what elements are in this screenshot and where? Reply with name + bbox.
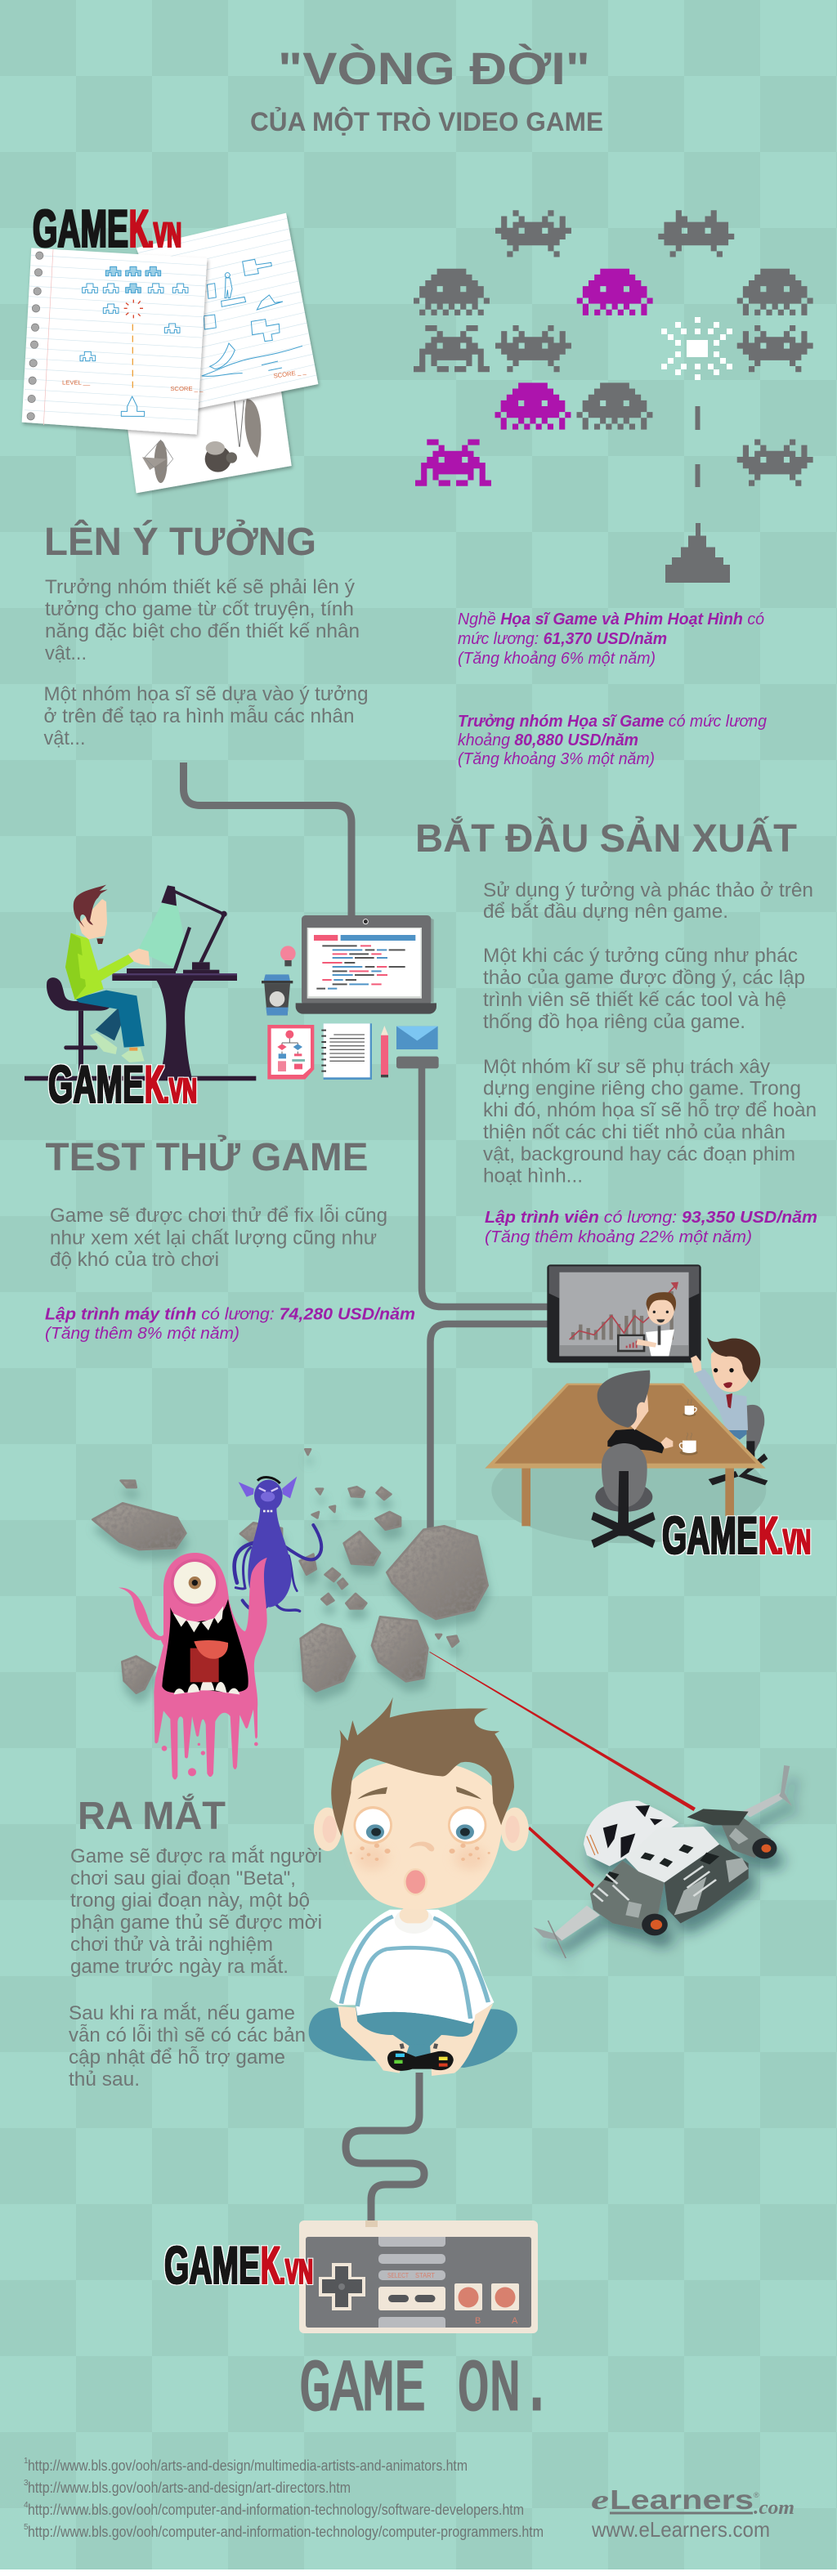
text block: hoạt hình... xyxy=(483,1165,583,1187)
player ship xyxy=(665,523,730,583)
heading: BẮT ĐẦU SẢN XUẤT xyxy=(415,816,797,861)
wings xyxy=(534,1765,792,1958)
footnotes: 5 xyxy=(24,2523,29,2532)
illustration: space invaders xyxy=(414,210,813,583)
heading: RA MẮT xyxy=(78,1793,226,1838)
person pointing, far chair xyxy=(691,1338,768,1485)
heading: TEST THỬ GAME xyxy=(46,1134,368,1179)
eyebrows xyxy=(357,1787,481,1800)
lamp light xyxy=(137,903,186,967)
text block: tưởng cho game từ cốt truyện, tính xyxy=(45,598,354,620)
text block: độ khó của trò chơi xyxy=(50,1249,219,1271)
text block: như xem xét lại chất lượng cũng như xyxy=(50,1228,377,1249)
select and start: SELECT xyxy=(387,2272,409,2279)
text block: Sử dụng ý tưởng và phác thảo ở trên xyxy=(483,879,813,901)
text block: thống đồ họa riêng của game. xyxy=(483,1011,745,1033)
logo: GameK: .VN xyxy=(163,1071,197,1111)
salary: testers: (Tăng thêm 8% một năm) xyxy=(45,1325,239,1343)
salary: programmers: Lập trình viên có lương: 93,350 USD/năm xyxy=(485,1209,817,1227)
text block: chơi sau giai đoạn "Beta", xyxy=(70,1867,296,1890)
illustration: rocks and monsters xyxy=(92,1449,488,1779)
salary: game artists: mức lương: 61,370 USD/năm xyxy=(458,630,667,648)
cable: idea to laptop xyxy=(183,763,351,919)
B button xyxy=(454,2283,482,2326)
panel: idea stage xyxy=(44,519,369,749)
illustration: sketched game design papers xyxy=(22,211,319,493)
asteroids xyxy=(92,1449,488,1693)
mouth xyxy=(404,1868,427,1895)
footnotes: http://www.bls.gov/ooh/computer-and-information-technology/computer-programmers.htm xyxy=(28,2524,544,2540)
face xyxy=(341,1760,503,1909)
B button: B xyxy=(475,2316,481,2326)
logo: eLearners xyxy=(591,2484,794,2542)
salary: testers: Lập trình máy tính có lương: 74,280 USD/năm xyxy=(45,1306,415,1324)
text block: vật, background hay các đoạn phim xyxy=(483,1143,795,1165)
invader row 2 xyxy=(414,269,813,315)
ears xyxy=(314,1808,529,1851)
pink monster xyxy=(119,1553,267,1779)
text block xyxy=(483,879,817,1187)
text block: game trước ngày ra mắt. xyxy=(70,1956,289,1978)
icon: envelope xyxy=(396,1026,438,1049)
wall monitor xyxy=(547,1264,701,1362)
invader row 3 xyxy=(414,325,813,372)
desk xyxy=(112,885,237,1078)
arms xyxy=(338,2004,493,2076)
logo: GameK: GAME xyxy=(48,1054,144,1114)
sketch paper: platformer game xyxy=(137,211,319,427)
logo: eLearners: Learners xyxy=(610,2484,754,2515)
icon: coffee cup xyxy=(262,974,293,1015)
laser beams xyxy=(429,1652,696,1888)
footnotes: http://www.bls.gov/ooh/arts-and-design/art-directors.htm xyxy=(28,2480,351,2496)
panel: testing stage xyxy=(45,1134,415,1343)
engines xyxy=(642,1838,777,1935)
salary: lead game artist: (Tăng khoảng 3% một năm) xyxy=(458,750,655,768)
nose xyxy=(409,1842,434,1851)
text block: khi đó, nhóm họa sĩ sẽ hỗ trợ để hoàn xyxy=(483,1099,817,1121)
select and start: START xyxy=(415,2272,435,2279)
text block xyxy=(44,576,369,749)
icon: flowchart xyxy=(267,1025,314,1080)
salary: testers xyxy=(45,1306,415,1343)
footnotes: 1 xyxy=(24,2457,29,2466)
logo: eLearners: .com xyxy=(754,2498,794,2519)
salary: game artists xyxy=(458,610,764,668)
gamepad xyxy=(387,2044,454,2071)
player bullets xyxy=(695,406,700,487)
table shadow xyxy=(491,1437,766,1543)
text block: Một nhóm kĩ sư sẽ phụ trách xây xyxy=(483,1056,770,1078)
chair xyxy=(47,977,110,1076)
logo: eLearners: e xyxy=(591,2485,609,2516)
salary: programmers xyxy=(485,1209,817,1246)
lap xyxy=(356,2012,472,2046)
text block: Một khi các ý tưởng cũng như phác xyxy=(483,945,798,967)
icon: pencil xyxy=(381,1026,388,1077)
explosion xyxy=(661,317,732,380)
d-pad xyxy=(319,2263,365,2310)
heading: LÊN Ý TƯỞNG xyxy=(44,519,316,564)
footnotes: 3 xyxy=(24,2479,29,2488)
floor line xyxy=(25,1076,256,1080)
salary: game artists: (Tăng khoảng 6% một năm) xyxy=(458,650,656,668)
invader row 4 xyxy=(495,382,652,430)
blue monster xyxy=(235,1477,321,1611)
illustration: developer at desk xyxy=(25,885,439,1080)
sketch paper: platformer game: SCORE _ _ xyxy=(273,368,307,380)
text block: thiện nốt các chi tiết nhỏ của nhân xyxy=(483,1121,786,1143)
text block: Game sẽ được chơi thử để fix lỗi cũng xyxy=(50,1205,387,1227)
text block: dựng engine riêng cho game. Trong xyxy=(483,1077,801,1100)
freckles xyxy=(350,1844,490,1861)
logo: GameK: K xyxy=(759,1505,778,1565)
text block: Game sẽ được ra mắt người xyxy=(70,1845,322,1867)
logo: GameK: K xyxy=(261,2235,280,2295)
footnotes xyxy=(24,2457,544,2540)
cable connector xyxy=(396,1057,439,1068)
salary: lead game artist xyxy=(458,713,767,768)
developer xyxy=(65,885,150,1062)
logo: GameK: GAME xyxy=(662,1505,758,1565)
logo: GameK: GAME xyxy=(164,2235,260,2295)
coffee cups xyxy=(679,1399,698,1456)
logo: GameK: K xyxy=(145,1054,164,1114)
salary: lead game artist: Trưởng nhóm Họa sĩ Game có mức lương xyxy=(458,713,767,731)
logo: GameK: .VN xyxy=(148,216,181,255)
eyes xyxy=(353,1806,486,1845)
footnotes: 4 xyxy=(24,2501,29,2510)
text block: Sau khi ra mắt, nếu game xyxy=(69,2002,295,2024)
icon: light bulb xyxy=(280,946,296,966)
hull xyxy=(584,1800,771,1930)
illustration: meeting room xyxy=(485,1264,768,1548)
title xyxy=(250,42,603,136)
salary: lead game artist: khoảng 80,880 USD/năm xyxy=(458,731,638,749)
sketch paper: vehicle engravings xyxy=(125,387,292,493)
logo: GameK: GAME xyxy=(33,199,128,258)
A button: A xyxy=(512,2316,518,2326)
logo: GameK: .VN xyxy=(777,1523,811,1562)
illustration: spaceship xyxy=(534,1765,792,1958)
title: "VÒNG ĐỜI" xyxy=(278,42,590,94)
text block: thảo của game được đồng ý, các lập xyxy=(483,967,805,989)
logo: eLearners: www.eLearners.com xyxy=(591,2517,770,2542)
cable: gamepad to console controller xyxy=(346,2073,424,2223)
hair xyxy=(331,1697,514,1836)
logo: eLearners: ® xyxy=(754,2491,759,2499)
footnotes: http://www.bls.gov/ooh/arts-and-design/multimedia-artists-and-animators.htm xyxy=(28,2457,468,2474)
invader row 1 xyxy=(495,210,734,257)
panel: production stage xyxy=(415,816,817,1246)
text block: vật... xyxy=(44,727,85,749)
shirt xyxy=(330,1910,494,2024)
text block: trình viên sẽ thiết kế các tool và hệ xyxy=(483,989,786,1011)
center strips xyxy=(378,2237,445,2328)
salary: programmers: (Tăng thêm khoảng 22% một năm) xyxy=(485,1228,752,1246)
text block: phận game thủ sẽ được mời xyxy=(70,1912,322,1934)
A button xyxy=(491,2283,519,2326)
icon: notebook xyxy=(321,1023,372,1080)
text block: Một nhóm họa sĩ sẽ dựa vào ý tưởng xyxy=(44,683,369,705)
meeting table xyxy=(485,1384,766,1526)
text block: thủ sau. xyxy=(69,2068,140,2091)
text block xyxy=(69,1845,322,2091)
footnotes: http://www.bls.gov/ooh/computer-and-information-technology/software-developers.htm xyxy=(28,2502,524,2518)
laptop xyxy=(296,915,436,1014)
text block: vật... xyxy=(45,642,87,664)
text block xyxy=(50,1205,387,1271)
cable: testing to release xyxy=(430,1324,549,1536)
text block: cập nhật để hỗ trợ game xyxy=(69,2046,285,2068)
text block: để bắt đầu dựng nên game. xyxy=(483,901,728,923)
text block: ở trên để tạo ra hình mẫu các nhân xyxy=(44,705,355,727)
sketch paper: shooter game: SCORE _ _ xyxy=(170,385,204,392)
person from behind with chair xyxy=(591,1371,673,1548)
sketch paper: shooter game xyxy=(22,248,210,435)
text block: vẫn có lỗi thì sẽ có các bản xyxy=(69,2024,306,2046)
invader row 5 xyxy=(415,440,813,486)
logo: GameK: .VN xyxy=(280,2252,313,2292)
closing title: game on: GAME ON. xyxy=(299,2350,553,2431)
text block: chơi thử và trải nghiệm xyxy=(70,1934,273,1956)
text block: Trưởng nhóm thiết kế sẽ phải lên ý xyxy=(45,576,355,598)
title: CỦA MỘT TRÒ VIDEO GAME xyxy=(250,107,603,136)
text block: năng đặc biệt cho đến thiết kế nhân xyxy=(45,620,360,642)
illustration: boy playing with gamepad xyxy=(309,1697,529,2076)
crossed legs xyxy=(309,2008,517,2068)
salary: game artists: Nghề Họa sĩ Game và Phim Hoạt Hình có xyxy=(458,610,764,628)
illustration: NES controller xyxy=(299,2220,538,2333)
text block: trong giai đoạn này, một bộ xyxy=(70,1890,310,1912)
sketch paper: shooter game: LEVEL __ xyxy=(62,379,91,387)
select and start xyxy=(378,2272,445,2310)
logo: GameK: K xyxy=(129,199,149,258)
panel: release stage xyxy=(69,1793,322,2091)
cable: production to testing xyxy=(422,1067,549,1307)
